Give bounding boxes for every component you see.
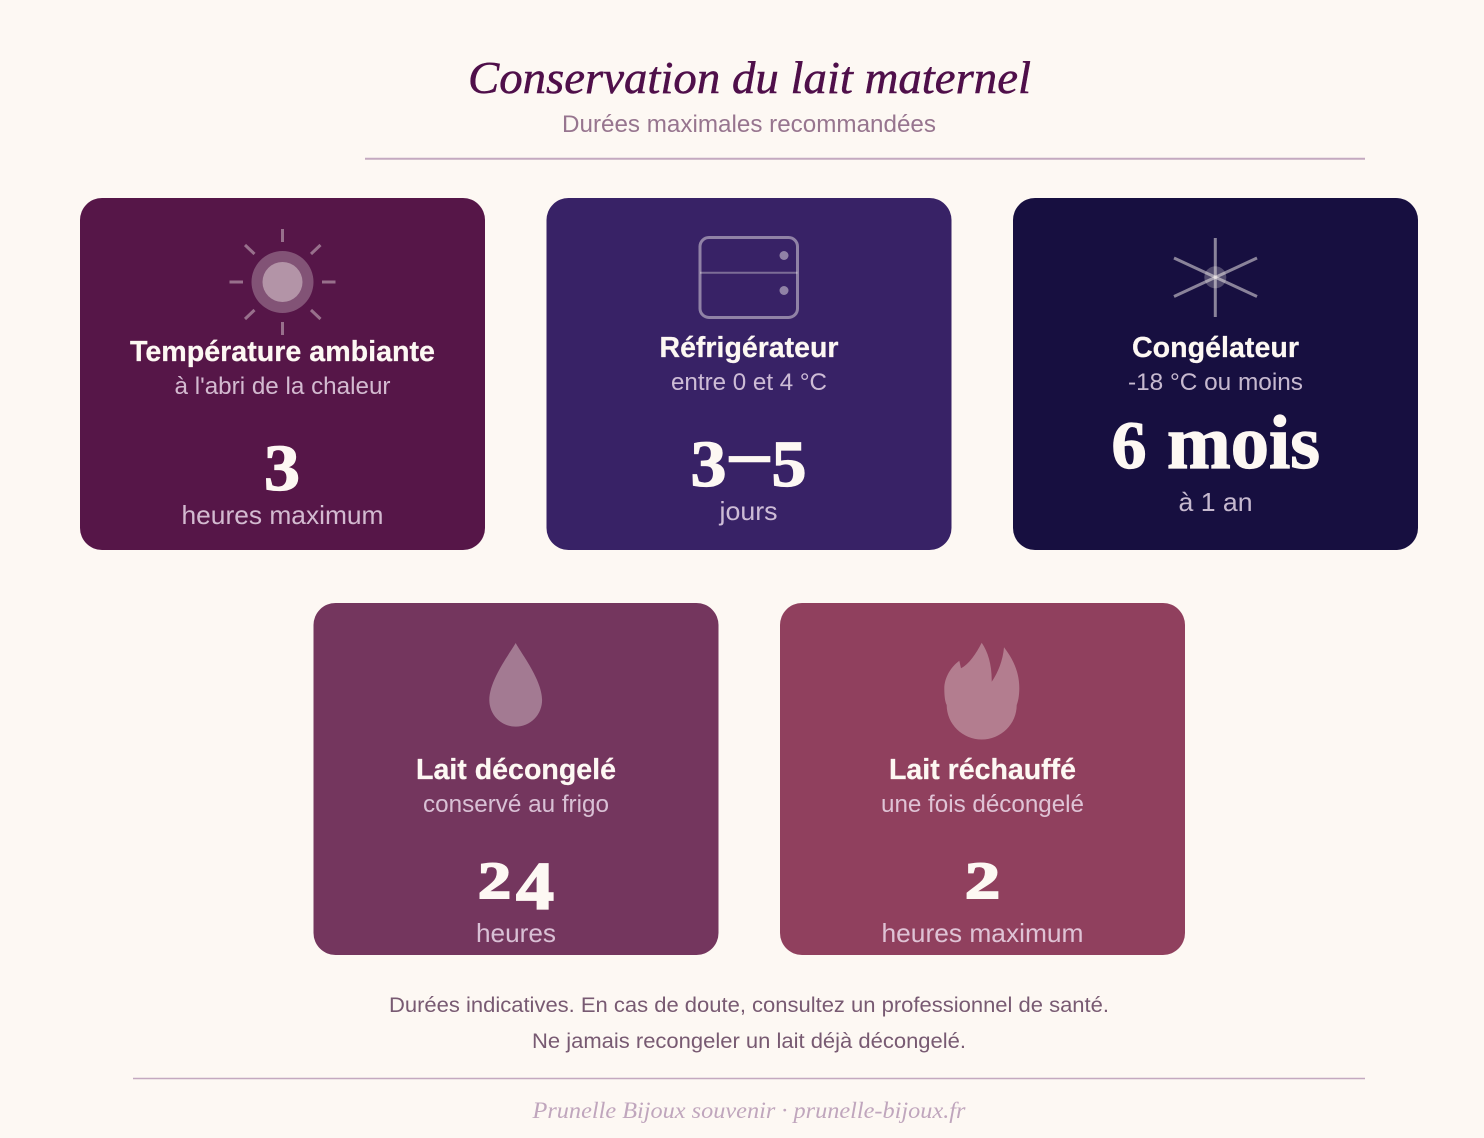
footer credit: Prunelle Bijoux souvenir · prunelle-bijoux.fr [531, 1098, 967, 1123]
duration unit: heures maximum [882, 918, 1084, 948]
condition: une fois décongelé [881, 791, 1084, 818]
duration value [478, 848, 554, 924]
icon: flame [944, 643, 1019, 740]
panel: réfrigérateur [546, 198, 952, 550]
icon: drop [489, 643, 542, 727]
duration value: 2 [478, 853, 511, 910]
duration value: 5 [772, 428, 806, 501]
title: Conservation du lait maternel [468, 52, 1031, 103]
duration unit: jours [718, 496, 778, 526]
panel: lait décongelé [314, 603, 718, 955]
condition: entre 0 et 4 °C [671, 369, 827, 396]
panel: congélateur [1013, 198, 1418, 550]
condition: -18 °C ou moins [1128, 369, 1303, 396]
footnote: Ne jamais recongeler un lait déjà décongelé. [532, 1029, 966, 1053]
duration value: 3 [264, 432, 300, 505]
icon: snowflake [1174, 238, 1257, 317]
icon: fridge [700, 238, 798, 318]
panel: lait réchauffé [780, 603, 1185, 955]
condition: à l'abri de la chaleur [174, 373, 391, 400]
heading: Réfrigérateur [660, 332, 838, 364]
panel: température ambiante [80, 198, 485, 550]
duration unit: heures [476, 918, 556, 948]
duration value [690, 408, 806, 501]
heading: Lait réchauffé [889, 754, 1076, 786]
footnote [389, 993, 1109, 1053]
heading: Lait décongelé [416, 754, 616, 786]
duration value: 6 [1112, 407, 1146, 483]
icon: sun [230, 229, 336, 335]
duration value: mois [1167, 401, 1320, 485]
heading: Température ambiante [130, 336, 435, 368]
duration unit: heures maximum [182, 500, 384, 530]
heading: Congélateur [1132, 332, 1299, 364]
duration value: 3 [690, 428, 726, 501]
subtitle: Durées maximales recommandées [562, 111, 936, 138]
duration value: 4 [516, 848, 554, 924]
footnote: Durées indicatives. En cas de doute, consultez un professionnel de santé. [389, 993, 1109, 1017]
duration value: 2 [965, 853, 1000, 910]
duration unit: à 1 an [1178, 487, 1252, 517]
duration value: – [728, 408, 770, 496]
condition: conservé au frigo [423, 791, 609, 818]
